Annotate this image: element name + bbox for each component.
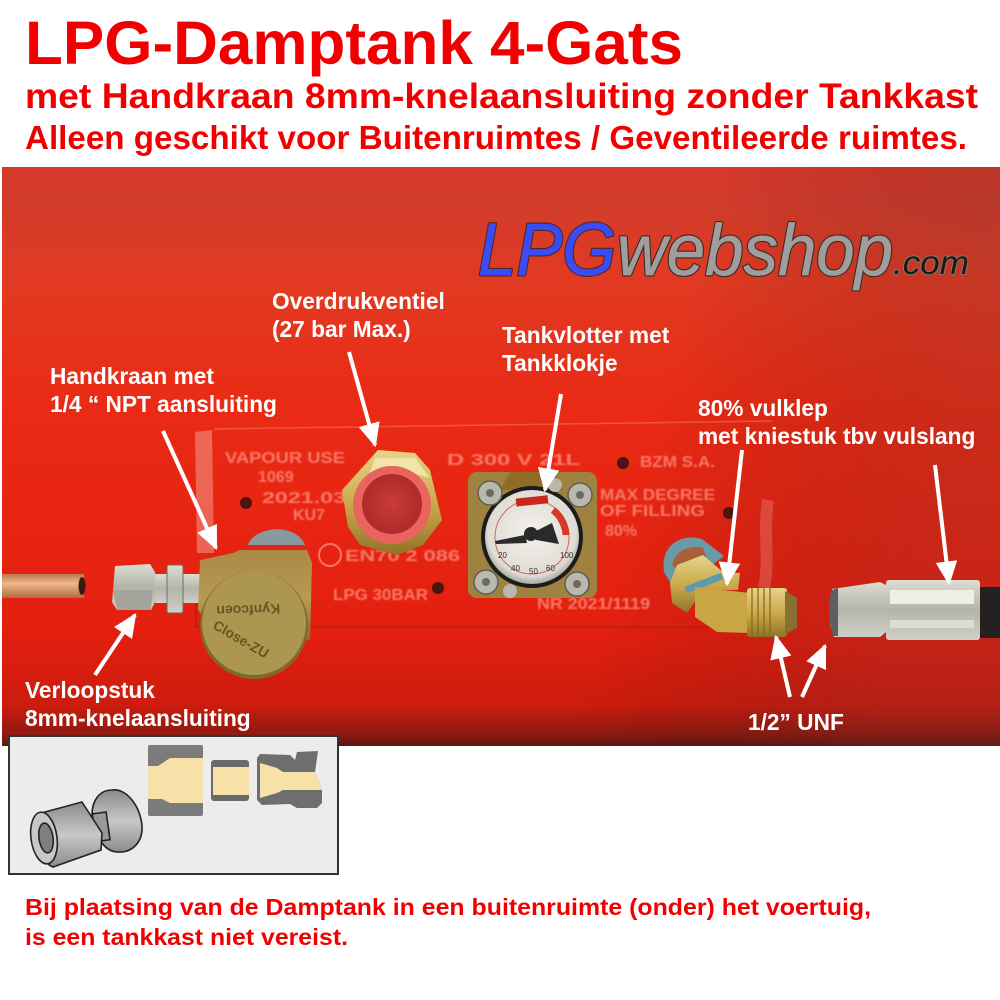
title: LPG-Damptank 4-Gats (25, 9, 683, 77)
icon: tank gauge: 60 (546, 564, 555, 573)
mounting plate: BZM S.A. (640, 454, 715, 471)
icon: fitting cross-section nut (148, 745, 203, 816)
icon: hand valve: Kynfcoen (216, 601, 280, 619)
label: Verloopstuk: Verloopstuk (25, 677, 155, 703)
mounting plate: VAPOUR USE (225, 450, 345, 467)
mounting plate: OF FILLING (600, 503, 705, 520)
label: Handkraan: 1/4 “ NPT aansluiting (50, 391, 277, 417)
subtitle: met Handkraan 8mm-knelaansluiting zonder Tankkast (25, 77, 978, 116)
logo: LPGwebshop.com: webshop (617, 211, 893, 291)
icon: tank gauge: 50 (529, 567, 538, 576)
icon: assembled fitting (28, 790, 142, 867)
logo: LPGwebshop.com (478, 208, 969, 291)
icon: tank gauge: 20 (498, 551, 507, 560)
footnote: is een tankkast niet vereist. (25, 924, 348, 950)
subtitle (25, 77, 978, 156)
label: vulklep (698, 395, 975, 449)
icon: copper tube (2, 574, 86, 598)
mounting plate: EN70 2 086 (345, 548, 460, 565)
icon: compression fitting (112, 564, 201, 613)
label: Handkraan: Handkraan met (50, 363, 214, 389)
logo: LPGwebshop.com: .com (893, 244, 969, 281)
mounting plate: D 300 V 21L (447, 452, 580, 469)
logo: LPGwebshop.com: webshop (617, 211, 893, 291)
panel: fitting diagram (9, 736, 338, 874)
label: Verloopstuk: 8mm-knelaansluiting (25, 705, 251, 731)
mounting plate: MAX DEGREE (600, 487, 715, 504)
footnote (25, 894, 871, 950)
label: Tankvlotter: Tankvlotter met (502, 322, 670, 348)
icon: elbow fill valve (663, 538, 797, 637)
icon: hand valve: Close-ZU (210, 617, 272, 661)
icon: hose connector (829, 580, 1000, 640)
arrows (95, 352, 949, 697)
icon: tank gauge: 40 (511, 564, 520, 573)
icon: fitting cross-section ring (211, 760, 249, 801)
mounting plate: NR 2021/1119 (537, 596, 650, 613)
label: Handkraan (50, 363, 277, 417)
panel: tank photo (2, 167, 1000, 746)
subtitle: Alleen geschikt voor Buitenruimtes / Geventileerde ruimtes. (25, 119, 967, 156)
label: vulklep: met kniestuk tbv vulslang (698, 423, 975, 449)
label: Overdrukventiel (272, 288, 445, 342)
mounting plate: 1069 (258, 469, 294, 486)
mounting plate: 2021.03 (262, 490, 346, 507)
mounting plate: 80% (605, 523, 637, 540)
icon: tank gauge: 100 (560, 551, 574, 560)
logo: LPGwebshop.com: LPG (478, 208, 616, 291)
icon: tank gauge (468, 472, 597, 598)
logo: LPGwebshop.com: LPG (478, 208, 616, 291)
filler reflection (764, 500, 768, 588)
icon: fitting cross-section body (257, 751, 322, 808)
mounting plate: LPG 30BAR (333, 587, 428, 604)
label: Tankvlotter (502, 322, 670, 376)
icon: pressure relief valve (342, 450, 442, 555)
footnote: Bij plaatsing van de Damptank in een buitenruimte (onder) het voertuig, (25, 894, 871, 920)
label: vulklep: 80% vulklep (698, 395, 828, 421)
label: Overdrukventiel: Overdrukventiel (272, 288, 445, 314)
label: Verloopstuk (25, 677, 251, 731)
label: Overdrukventiel: (27 bar Max.) (272, 316, 411, 342)
label: UNF: 1/2” UNF (748, 709, 844, 735)
mounting plate: KU7 (293, 507, 325, 524)
icon: hand valve (198, 529, 312, 679)
label: Tankvlotter: Tankklokje (502, 350, 618, 376)
mounting plate (195, 421, 772, 627)
